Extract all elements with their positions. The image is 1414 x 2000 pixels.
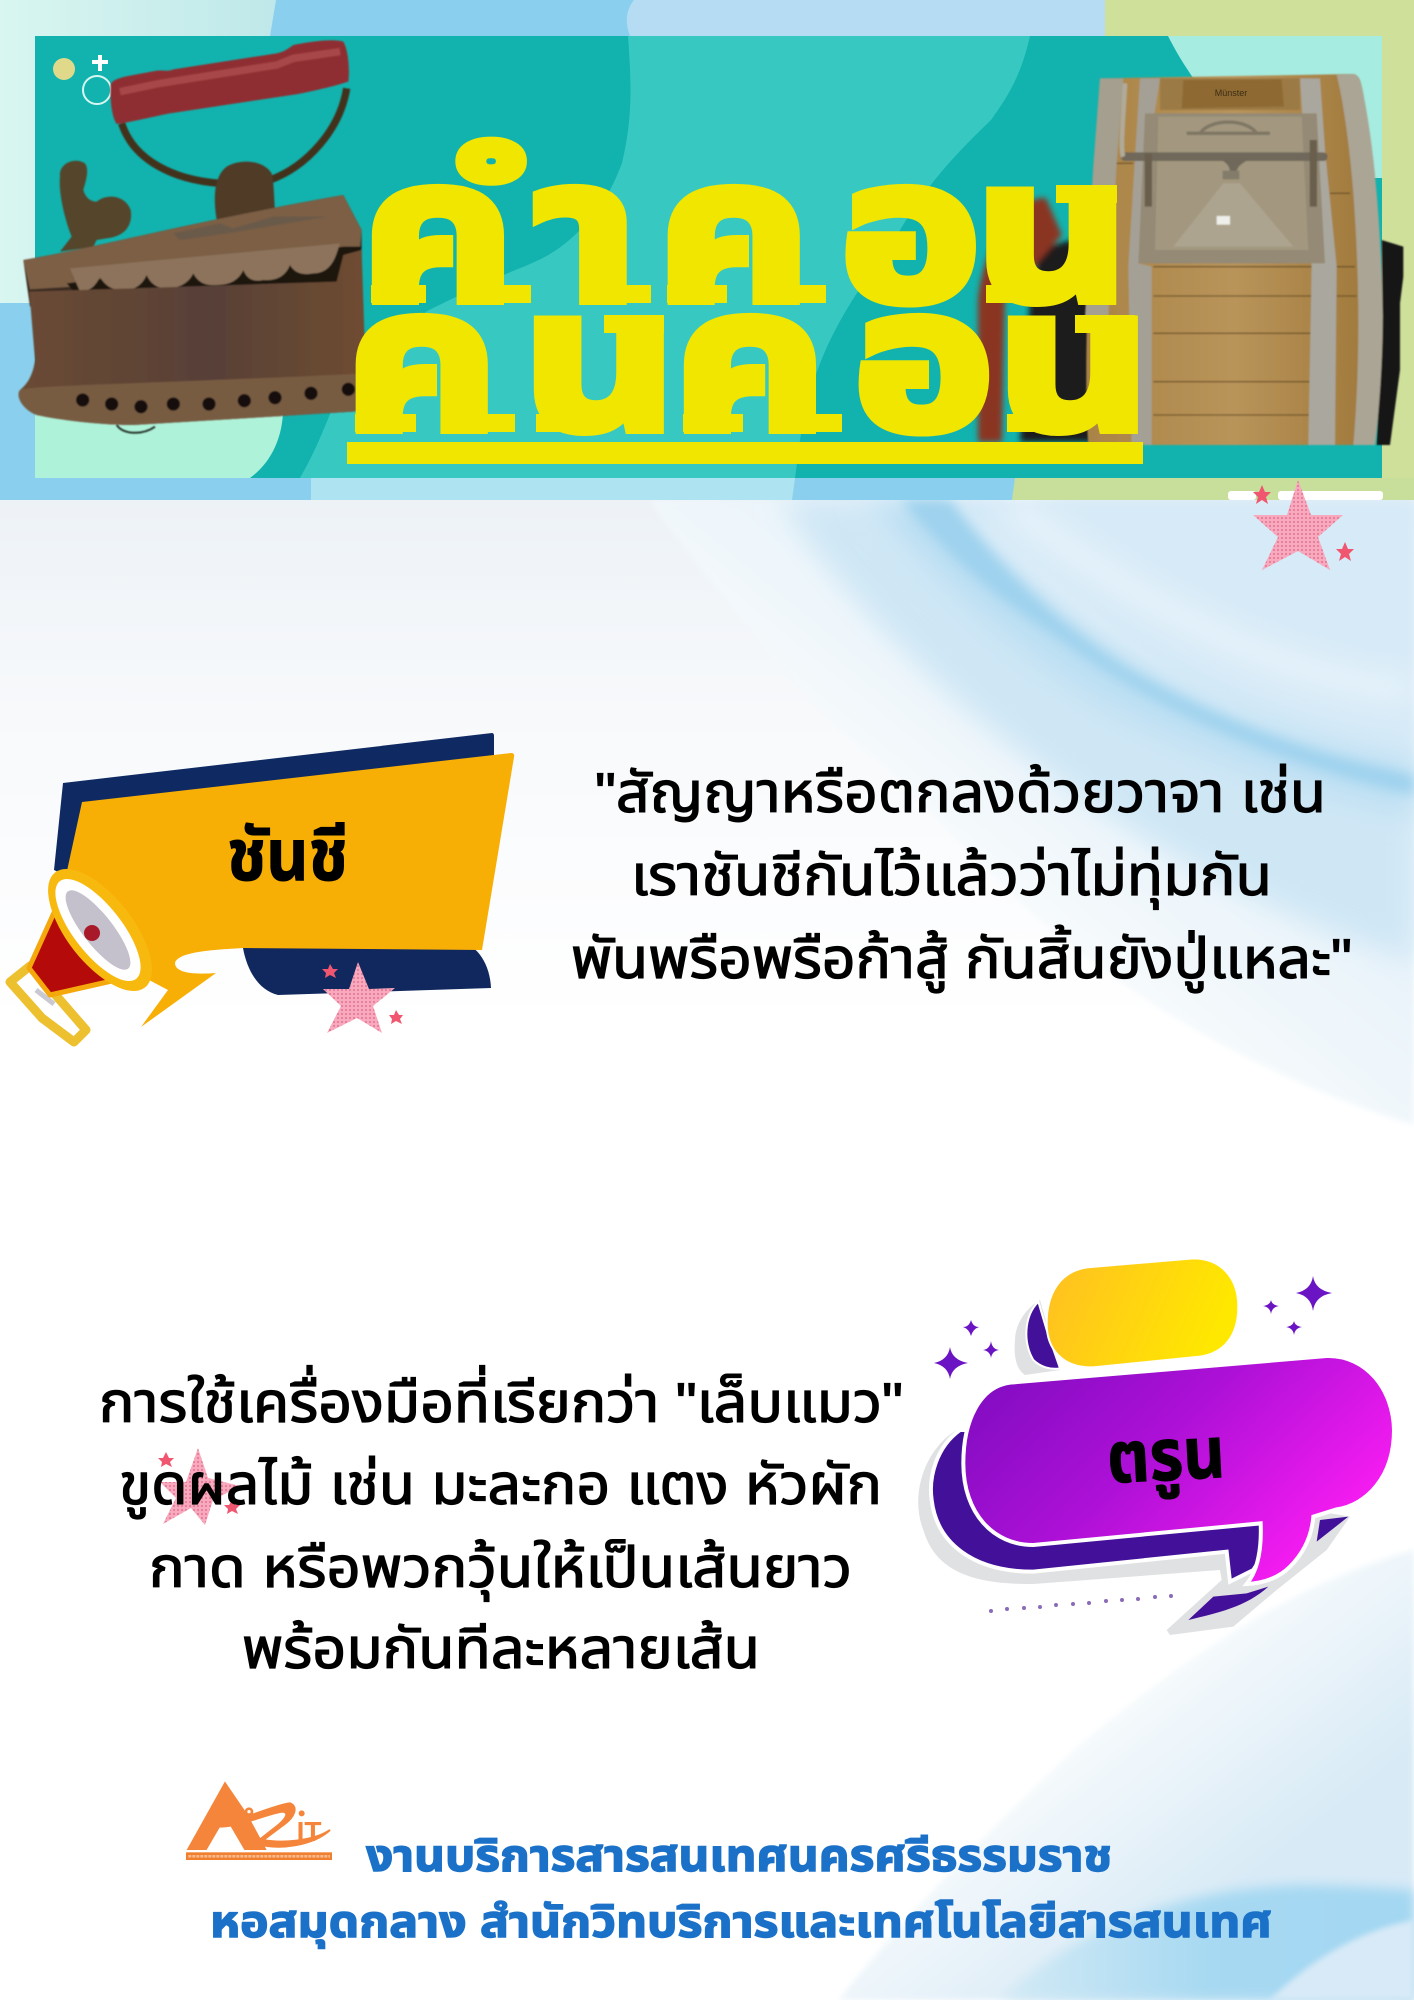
star: label xyxy=(322,962,403,1033)
title: คำคอน คนคอน xyxy=(345,122,1151,472)
label text: ตรูน xyxy=(1105,1413,1227,1502)
dotted line xyxy=(989,1594,1173,1613)
text block: meaning of ชันชี: "สัญญาหรือตกลงด้วยวาจา เช่น xyxy=(595,761,1326,824)
header banner xyxy=(0,0,1414,570)
text block: meaning of ตรูน: กาด หรือพวกวุ้นให้เป็นเส้นยาว xyxy=(149,1536,852,1601)
label text: ชันชี xyxy=(227,816,348,896)
brass plate text: Münster xyxy=(1215,88,1247,98)
text block: meaning of ตรูน: ขูดผลไม้ เช่น มะละกอ แตง หัวผัก xyxy=(119,1453,882,1519)
flat iron photo illustration xyxy=(19,40,367,433)
panel: ตรูน speech bubble xyxy=(918,1258,1394,1635)
text block: meaning of ชันชี xyxy=(571,761,1352,993)
navy lower tab xyxy=(243,942,491,995)
star: header xyxy=(1253,480,1354,570)
title: คำคอน คนคอน: คนคอน xyxy=(345,251,1151,472)
teal panel xyxy=(35,36,1382,478)
header background colour blocks xyxy=(0,0,1414,500)
magenta bubble xyxy=(963,1356,1394,1584)
star: behind second text block xyxy=(158,1448,240,1525)
icon: megaphone xyxy=(10,852,171,1042)
text block: meaning of ชันชี: เราชันชีกันไว้แล้วว่าไม่ทุ่มกัน xyxy=(631,844,1272,909)
footer text xyxy=(210,1832,1272,1949)
small decorations xyxy=(53,55,111,104)
text block: meaning of ชันชี: พันพรือพรือก้าสู้ กันสิ้นยังปู่แหละ" xyxy=(571,924,1352,993)
footer text: หอสมุดกลาง สำนักวิทบริการและเทศโนโลยีสารสนเทศ xyxy=(210,1898,1272,1949)
logo: A2IT xyxy=(186,1783,332,1860)
dark purple back shape xyxy=(931,1430,1300,1582)
navy back plate xyxy=(54,733,494,880)
title: คำคอน คนคอน: คำคอน xyxy=(361,122,1129,343)
yellow pill xyxy=(1047,1258,1238,1367)
washing machine photo illustration xyxy=(1085,74,1403,445)
icon: sparkles xyxy=(934,1276,1332,1379)
text block: meaning of ตรูน xyxy=(99,1365,903,1680)
page background with blue swooshes xyxy=(0,500,1414,2000)
panel: ชันชี megaphone label xyxy=(10,733,514,1042)
bubble shadow outline xyxy=(918,1300,1350,1635)
logo: A2IT: IT xyxy=(297,1816,322,1847)
yellow label xyxy=(65,753,514,1027)
footer text: งานบริการสารสนเทศนครศรีธรรมราช xyxy=(366,1832,1112,1881)
text block: meaning of ตรูน: การใช้เครื่องมือที่เรียกว่า "เล็บแมว" xyxy=(99,1365,903,1434)
text block: meaning of ตรูน: พร้อมกันทีละหลายเส้น xyxy=(242,1617,760,1680)
machine parts behind the title xyxy=(978,198,1110,442)
